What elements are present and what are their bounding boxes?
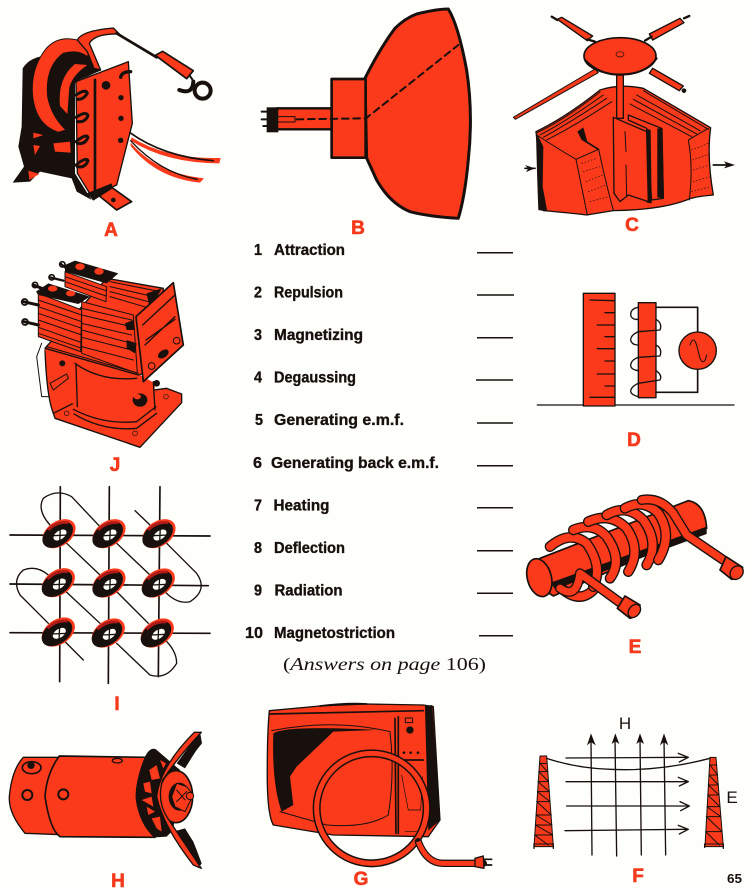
numbered list of magnetic effects: 9 xyxy=(254,582,262,600)
numbered list of magnetic effects: Radiation xyxy=(274,582,342,600)
numbered list of magnetic effects: 4 xyxy=(254,370,262,386)
diagram F: electromagnetic wave between towers xyxy=(534,733,723,856)
numbered list of magnetic effects: Deflection xyxy=(274,540,345,557)
diagram C: magnetic core with disc and rods xyxy=(513,16,735,215)
label G: G xyxy=(354,869,368,890)
answer blanks xyxy=(476,253,514,636)
label E: E xyxy=(629,637,641,658)
field label H: H xyxy=(619,714,631,733)
numbered list of magnetic effects: Generating back e.m.f. xyxy=(271,455,439,472)
numbered list of magnetic effects: Degaussing xyxy=(274,370,356,386)
numbered list of magnetic effects: 5 xyxy=(255,412,263,429)
diagram D: magnetostriction rod with ruler xyxy=(537,293,734,406)
label J: J xyxy=(110,455,120,476)
numbered list of magnetic effects: Generating e.m.f. xyxy=(274,412,404,429)
numbered list of magnetic effects: 1 xyxy=(254,242,262,259)
numbered list of magnetic effects xyxy=(245,242,439,642)
numbered list of magnetic effects: Magnetostriction xyxy=(274,625,395,642)
label B: B xyxy=(351,218,365,239)
numbered list of magnetic effects: 8 xyxy=(254,540,262,557)
diagram G: television with degaussing coil xyxy=(267,704,492,868)
field label E: E xyxy=(726,788,738,807)
numbered list of magnetic effects: 6 xyxy=(253,455,262,472)
answers note: (Answers on page 106) xyxy=(283,654,486,675)
label C: C xyxy=(625,215,639,236)
diagram I: magnetic core memory grid xyxy=(10,487,210,683)
label D: D xyxy=(627,430,641,451)
numbered list of magnetic effects: Repulsion xyxy=(274,285,343,302)
numbered list of magnetic effects: Attraction xyxy=(274,242,345,259)
page number: 65 xyxy=(727,871,742,886)
diagram J: relay stack on base xyxy=(22,261,183,447)
label I: I xyxy=(114,694,120,715)
label F: F xyxy=(632,866,644,887)
numbered list of magnetic effects: Magnetizing xyxy=(274,327,363,344)
numbered list of magnetic effects: 7 xyxy=(254,498,262,514)
numbered list of magnetic effects: Heating xyxy=(274,498,330,514)
numbered list of magnetic effects: 10 xyxy=(245,625,263,642)
numbered list of magnetic effects: 2 xyxy=(254,285,262,302)
diagram B: picture tube xyxy=(262,9,470,218)
diagram H: motor with fan xyxy=(9,732,202,868)
diagram E: coil on iron rod xyxy=(523,499,746,620)
diagram A: transformer with coil xyxy=(13,28,221,210)
numbered list of magnetic effects: 3 xyxy=(254,327,262,344)
label A: A xyxy=(104,220,118,241)
